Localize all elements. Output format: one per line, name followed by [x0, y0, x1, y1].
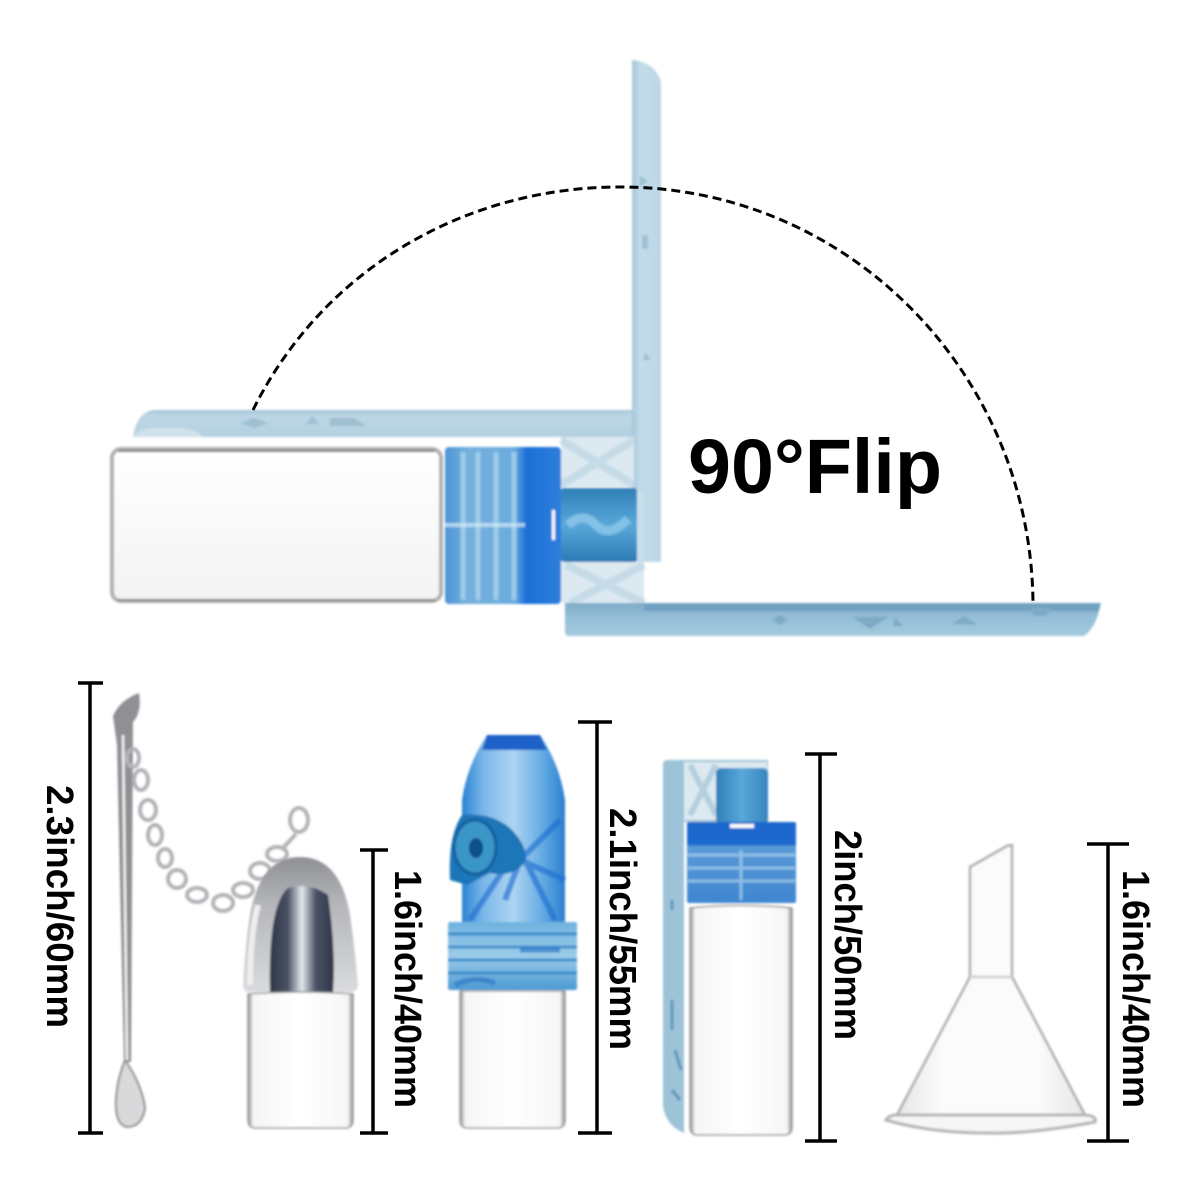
title: 90°Flip: 90°Flip	[688, 424, 942, 510]
icon: glass vial with chrome cap	[243, 857, 358, 1128]
label: 1.6inch/40mm: 1.6inch/40mm	[1114, 870, 1156, 1108]
lever: lowered horizontal position	[565, 603, 1101, 636]
blue thread ring	[448, 922, 577, 990]
hinge: translucent crystal block	[561, 437, 644, 603]
glass body	[460, 991, 565, 1128]
blue cap	[687, 822, 796, 903]
blue nozzle	[561, 488, 644, 562]
dashed arc showing 90 degree flip	[253, 187, 1033, 605]
dimension: funnel height	[1087, 844, 1156, 1141]
spoon	[113, 693, 145, 1127]
flip diagram: assembled vial with hinged lever	[112, 60, 1101, 636]
dimension: blue bullet vial height	[578, 722, 643, 1133]
chain	[127, 749, 308, 911]
label: 1.6inch/40mm: 1.6inch/40mm	[386, 870, 428, 1108]
blue nozzle	[716, 768, 768, 824]
icon: clear funnel	[886, 845, 1095, 1133]
lever: flipped-back horizontal position	[133, 410, 634, 437]
blue threaded cap	[445, 447, 561, 604]
glass body	[690, 906, 792, 1135]
lever: upright vertical position	[632, 60, 661, 562]
glass body	[248, 992, 353, 1128]
dimension: flip vial height	[805, 754, 868, 1141]
label: 2.1inch/55mm: 2.1inch/55mm	[601, 808, 643, 1050]
dimension: spoon height	[38, 682, 103, 1133]
side nozzle	[450, 815, 526, 885]
icon: vial with flip lever	[663, 760, 796, 1135]
glass vial	[112, 449, 441, 601]
chrome bullet cap	[243, 857, 358, 992]
dimension: chrome vial height	[360, 850, 428, 1133]
label: 2.3inch/60mm: 2.3inch/60mm	[38, 785, 80, 1028]
icon: metal spoon with chain	[113, 693, 308, 1127]
icon: glass vial with blue bullet cap	[448, 735, 577, 1128]
label: 2inch/50mm: 2inch/50mm	[826, 830, 868, 1040]
lever back	[663, 760, 768, 1133]
blue bullet	[450, 735, 565, 922]
